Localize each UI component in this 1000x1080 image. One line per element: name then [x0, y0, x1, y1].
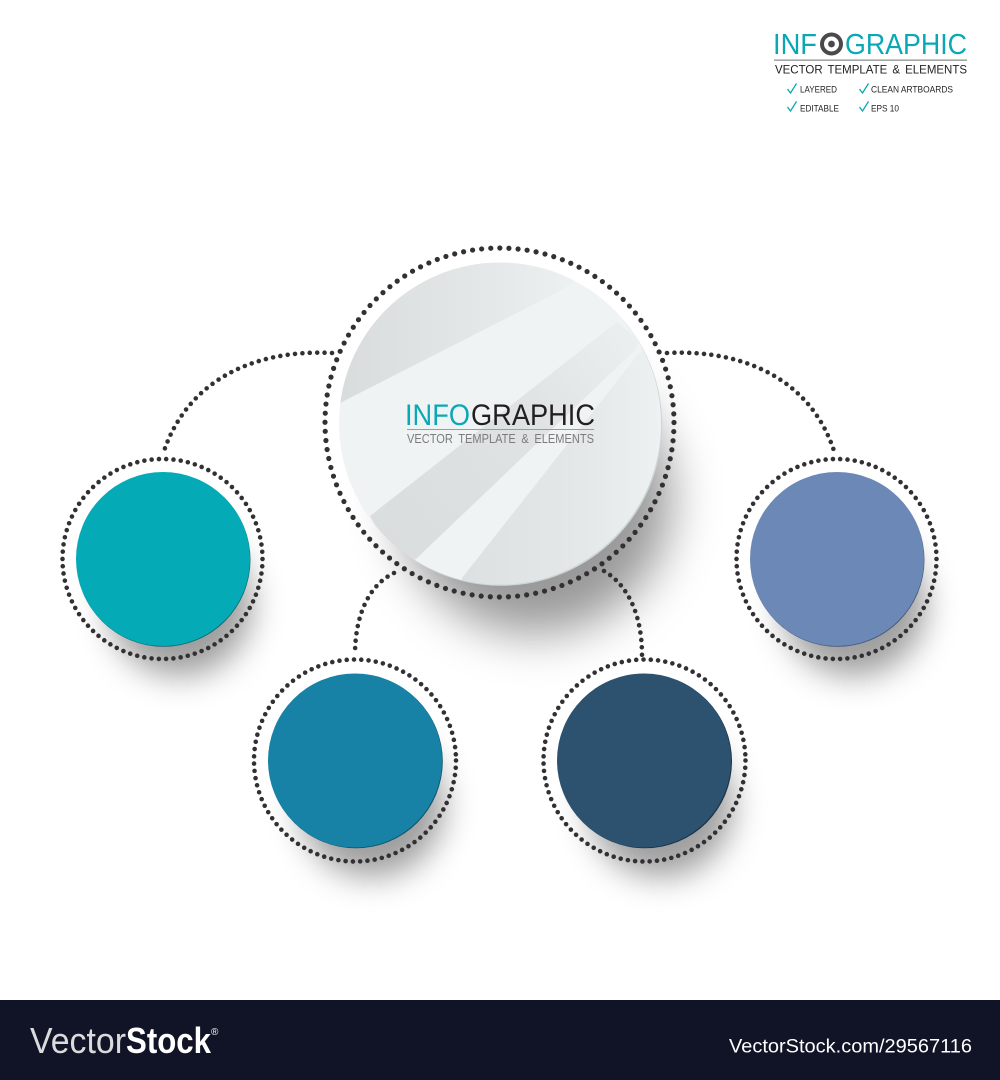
logo subtitle: VECTOR TEMPLATE & ELEMENTS [775, 62, 967, 76]
central title: INFO [405, 399, 470, 432]
icon: check [860, 102, 868, 111]
connector: center to ocean [355, 573, 394, 655]
logo rule [774, 60, 967, 61]
central dotted ring [325, 248, 674, 597]
drop shadow: navy circle [589, 733, 733, 877]
feature: layered: LAYERED [800, 84, 837, 94]
blue circle [736, 459, 936, 659]
connector: center to navy [604, 571, 642, 655]
feature: editable: EDITABLE [800, 104, 839, 114]
central circle [325, 248, 680, 600]
icon: target O [822, 34, 841, 54]
teal circle [62, 459, 262, 659]
logo wordmark: INF [773, 29, 817, 61]
central title: GRAPHIC [471, 399, 595, 432]
footer url: VectorStock.com/29567116 [729, 1036, 972, 1058]
footer brand: ® [211, 1027, 219, 1038]
icon: check [788, 102, 796, 111]
drop shadow: central circle [399, 362, 671, 634]
logo wordmark: GRAPHIC [845, 29, 967, 61]
icon: check [860, 84, 868, 93]
footer bar [0, 1000, 1000, 1080]
footer brand: Vector [30, 1020, 126, 1061]
connector: center to blue [667, 353, 835, 454]
central rim [340, 264, 662, 586]
central title: VECTOR TEMPLATE & ELEMENTS [407, 431, 594, 446]
logo wordmark [773, 29, 967, 61]
dotted connectors [163, 353, 835, 655]
feature: eps 10: EPS 10 [871, 104, 899, 114]
icon: check [788, 84, 796, 93]
central title [405, 399, 595, 446]
top right logo [773, 29, 967, 114]
navy circle [544, 660, 746, 862]
feature: clean artboards: CLEAN ARTBOARDS [871, 84, 953, 94]
central disc with light rays [339, 262, 661, 584]
drop shadow: teal circle [108, 532, 252, 676]
footer brand: Stock [126, 1020, 212, 1061]
footer brand [30, 1020, 219, 1061]
connector: center to teal [163, 353, 332, 454]
drop shadow: blue circle [782, 532, 926, 676]
ocean circle [254, 660, 456, 862]
drop shadow: ocean circle [300, 733, 444, 877]
feature list [788, 84, 953, 114]
